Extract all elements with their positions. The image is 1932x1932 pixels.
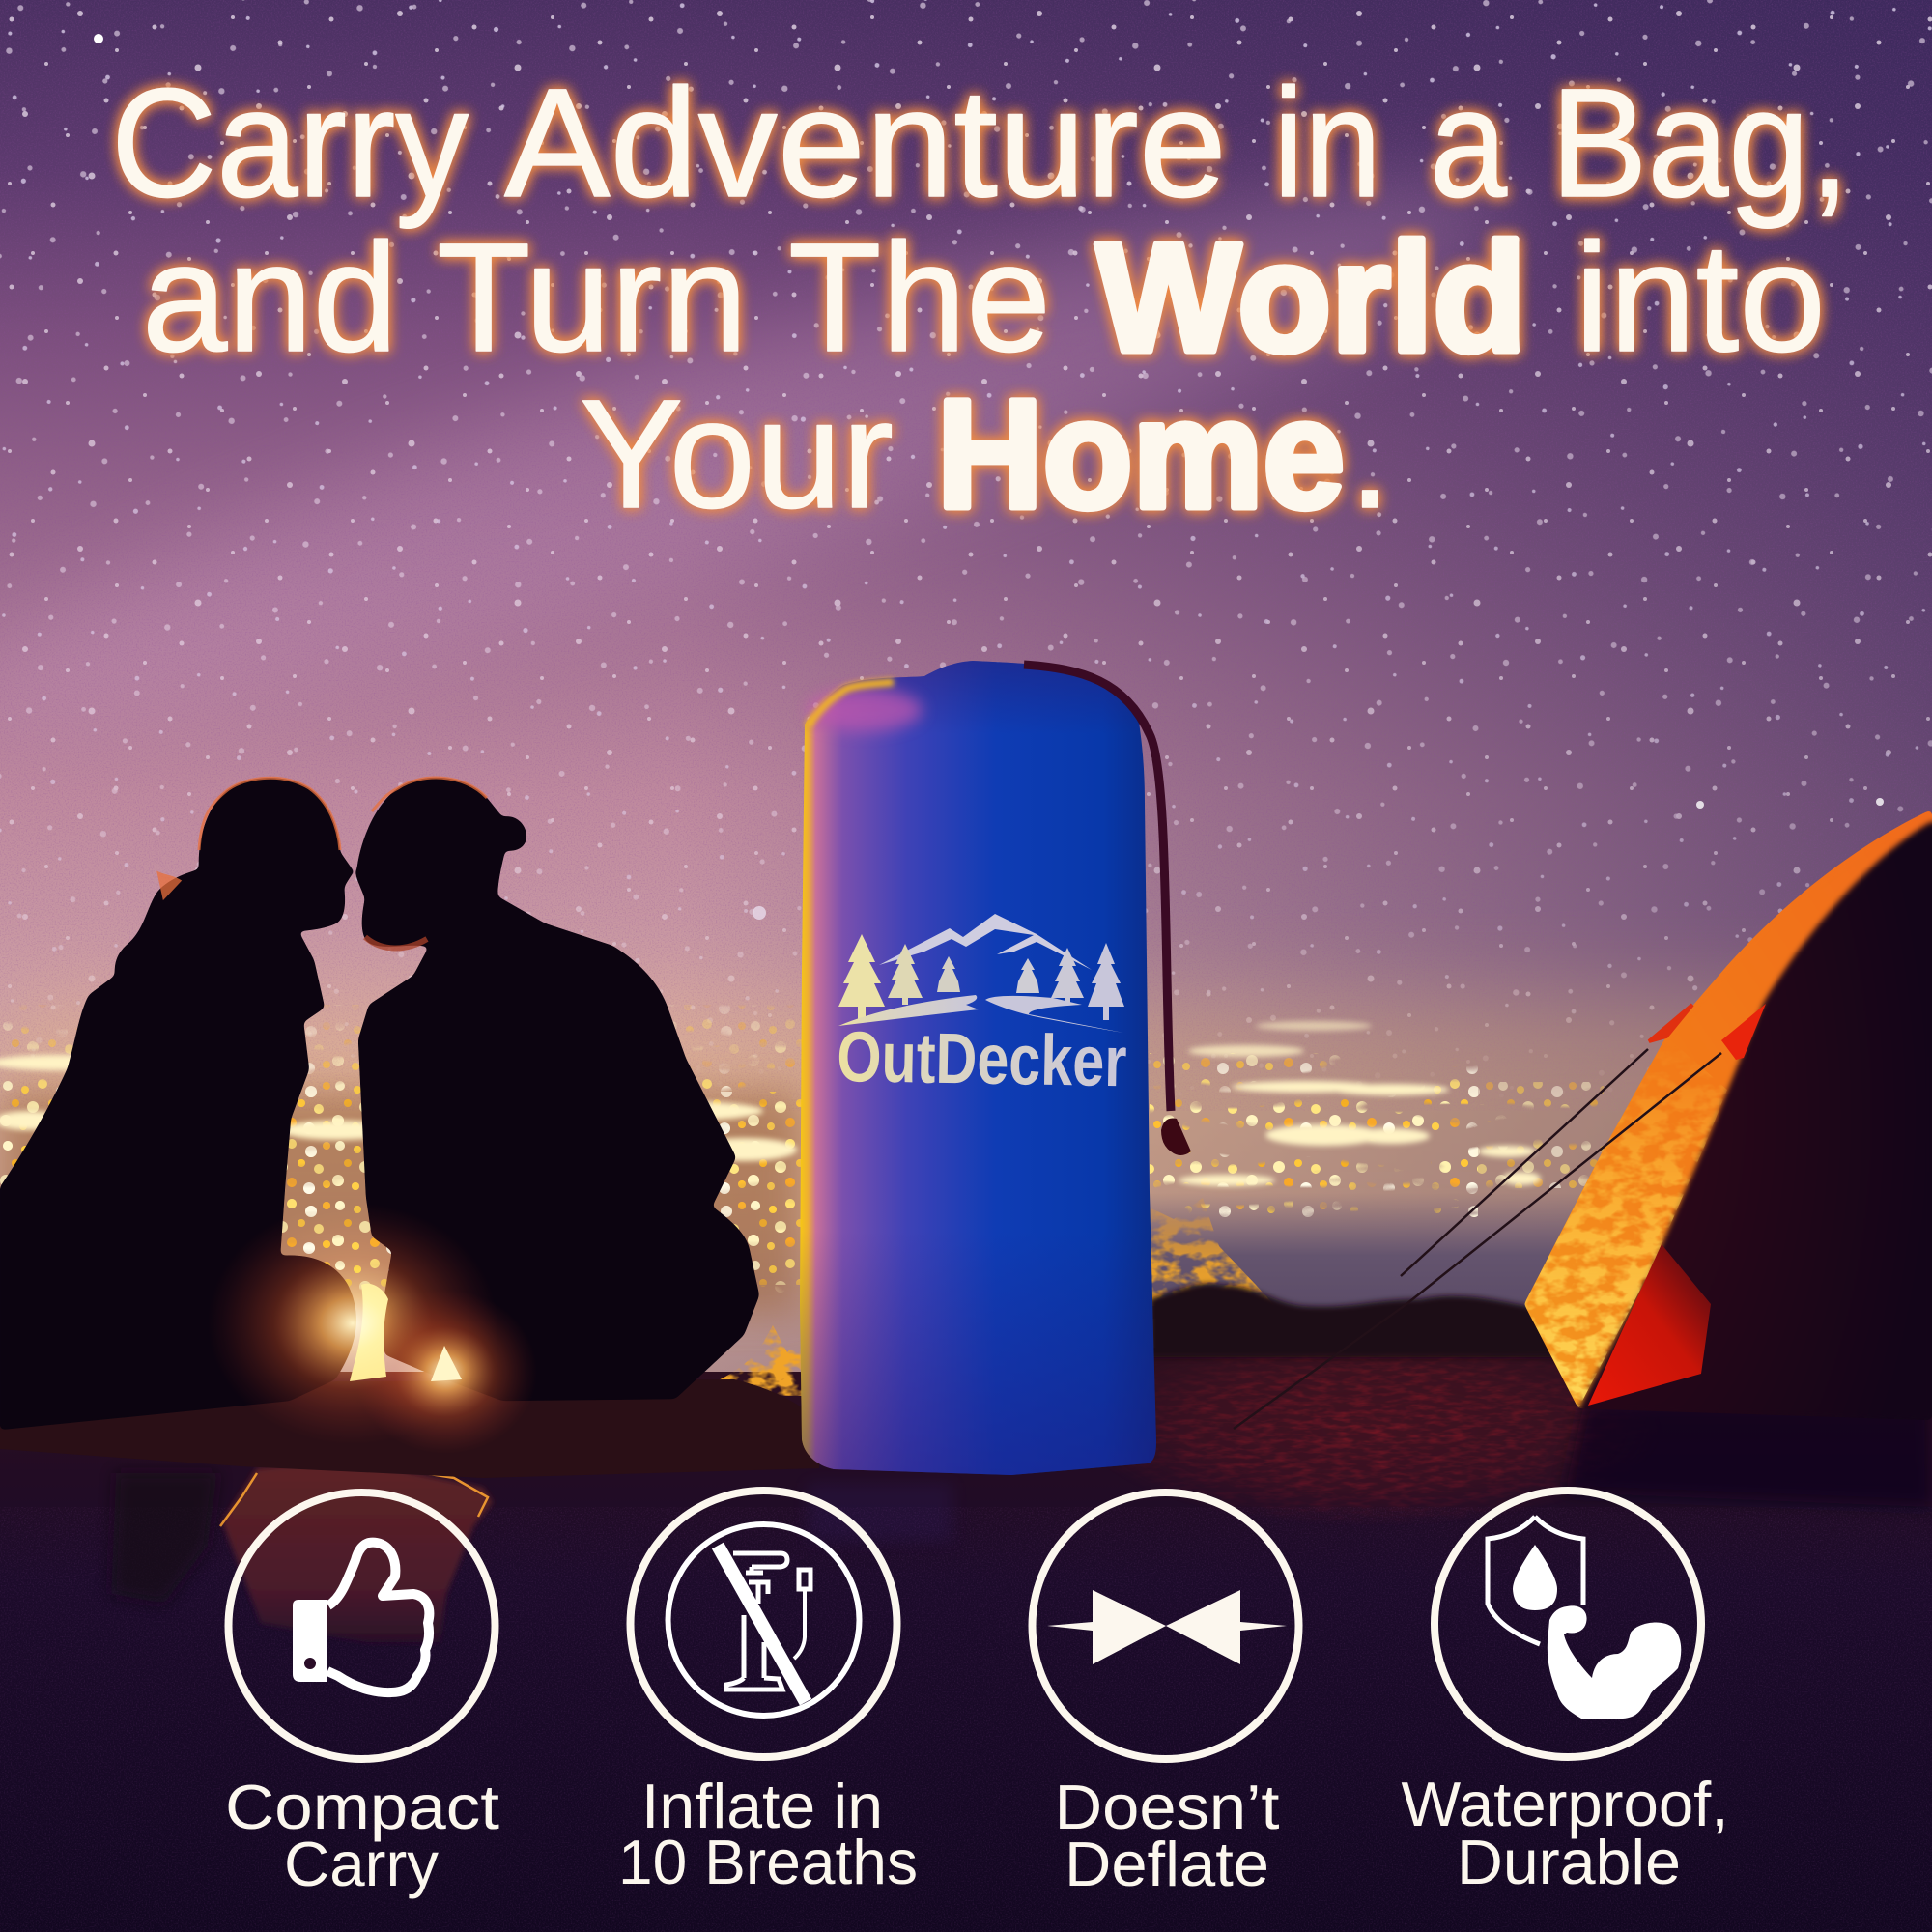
- headline line 1: Adventure: [504, 56, 1227, 229]
- campfire glow over couple: [208, 1203, 537, 1454]
- product stuff sack: [800, 661, 1191, 1475]
- feature: compact carry: [225, 1492, 499, 1899]
- city lights on the horizon: [0, 995, 1932, 1319]
- tent red lower panel: [1588, 1244, 1711, 1406]
- drawstring cord: [1024, 665, 1191, 1155]
- man silhouette: [356, 778, 759, 1401]
- label: 10 Breaths: [618, 1827, 918, 1897]
- feature: inflate in 10 breaths: [618, 1491, 918, 1897]
- headline line 2: World: [1096, 211, 1526, 384]
- tent lit orange side: [1524, 810, 1932, 1408]
- label: Inflate in: [641, 1771, 883, 1841]
- foreground ground and grass: [0, 1198, 1932, 1932]
- tent yellow sunlit texture: [1524, 1037, 1727, 1408]
- headline line 2: The: [788, 211, 1051, 384]
- woman silhouette: [0, 778, 356, 1430]
- bag body: [800, 661, 1156, 1475]
- faint bag reflection on ground: [808, 1483, 952, 1541]
- headline line 2: into: [1575, 211, 1826, 384]
- bag logo: [837, 914, 1127, 1101]
- logo trees: [838, 934, 1124, 1020]
- label: Doesn’t: [1055, 1772, 1279, 1842]
- guy lines: [1234, 1049, 1721, 1429]
- headline line 2: and: [142, 211, 398, 384]
- headline line 3: Home: [937, 367, 1345, 540]
- headline line 1: in: [1273, 56, 1381, 229]
- feature: waterproof, durable: [1401, 1491, 1729, 1897]
- headline line 1: a: [1430, 56, 1507, 229]
- headline line 1: Carry: [111, 56, 469, 229]
- night sky background: [0, 0, 1932, 1401]
- bright gap light between couple: [350, 1284, 388, 1381]
- rock patch below blanket: [111, 1459, 493, 1642]
- lantern flame: [431, 1346, 462, 1381]
- logo mountains: [879, 914, 1092, 970]
- headline: [111, 56, 1850, 540]
- couple silhouette: [0, 778, 759, 1430]
- label: Deflate: [1065, 1829, 1269, 1899]
- icon: valve: [1047, 1590, 1287, 1664]
- icon: crossed-out pump: [668, 1524, 860, 1716]
- label: Carry: [284, 1829, 439, 1899]
- circle badge: [228, 1492, 495, 1759]
- headline line 1: Bag,: [1550, 56, 1850, 229]
- orange lit grass left of bag: [688, 1325, 802, 1396]
- circle badge: [1032, 1492, 1298, 1759]
- tent red flap: [1721, 1004, 1766, 1060]
- headline line 3: .: [1349, 367, 1391, 540]
- label: Waterproof,: [1401, 1769, 1729, 1839]
- blanket under couple: [0, 1379, 821, 1478]
- headline line 2: Turn: [437, 211, 748, 384]
- bag top-left highlight: [807, 682, 923, 731]
- icon: shield, water drop and flexed arm: [1488, 1517, 1681, 1719]
- label: Compact: [225, 1772, 499, 1842]
- orange lit grass right of bag: [1150, 1198, 1275, 1306]
- feature: doesn't deflate: [1032, 1492, 1298, 1899]
- logo ground swooshes: [838, 995, 979, 1026]
- headline line 3: Your: [580, 367, 894, 540]
- circle badge: [1435, 1491, 1701, 1757]
- dark bushes: [1150, 1284, 1584, 1357]
- icon: thumbs up: [293, 1543, 429, 1692]
- logo wordmark: OutDecker: [837, 1016, 1127, 1101]
- circle badge: [630, 1491, 896, 1757]
- tent dark side: [1578, 810, 1932, 1420]
- tent ground shadow: [1565, 1401, 1932, 1507]
- tent: [1234, 810, 1932, 1507]
- label: Durable: [1457, 1827, 1681, 1897]
- hair rim light: [159, 778, 487, 949]
